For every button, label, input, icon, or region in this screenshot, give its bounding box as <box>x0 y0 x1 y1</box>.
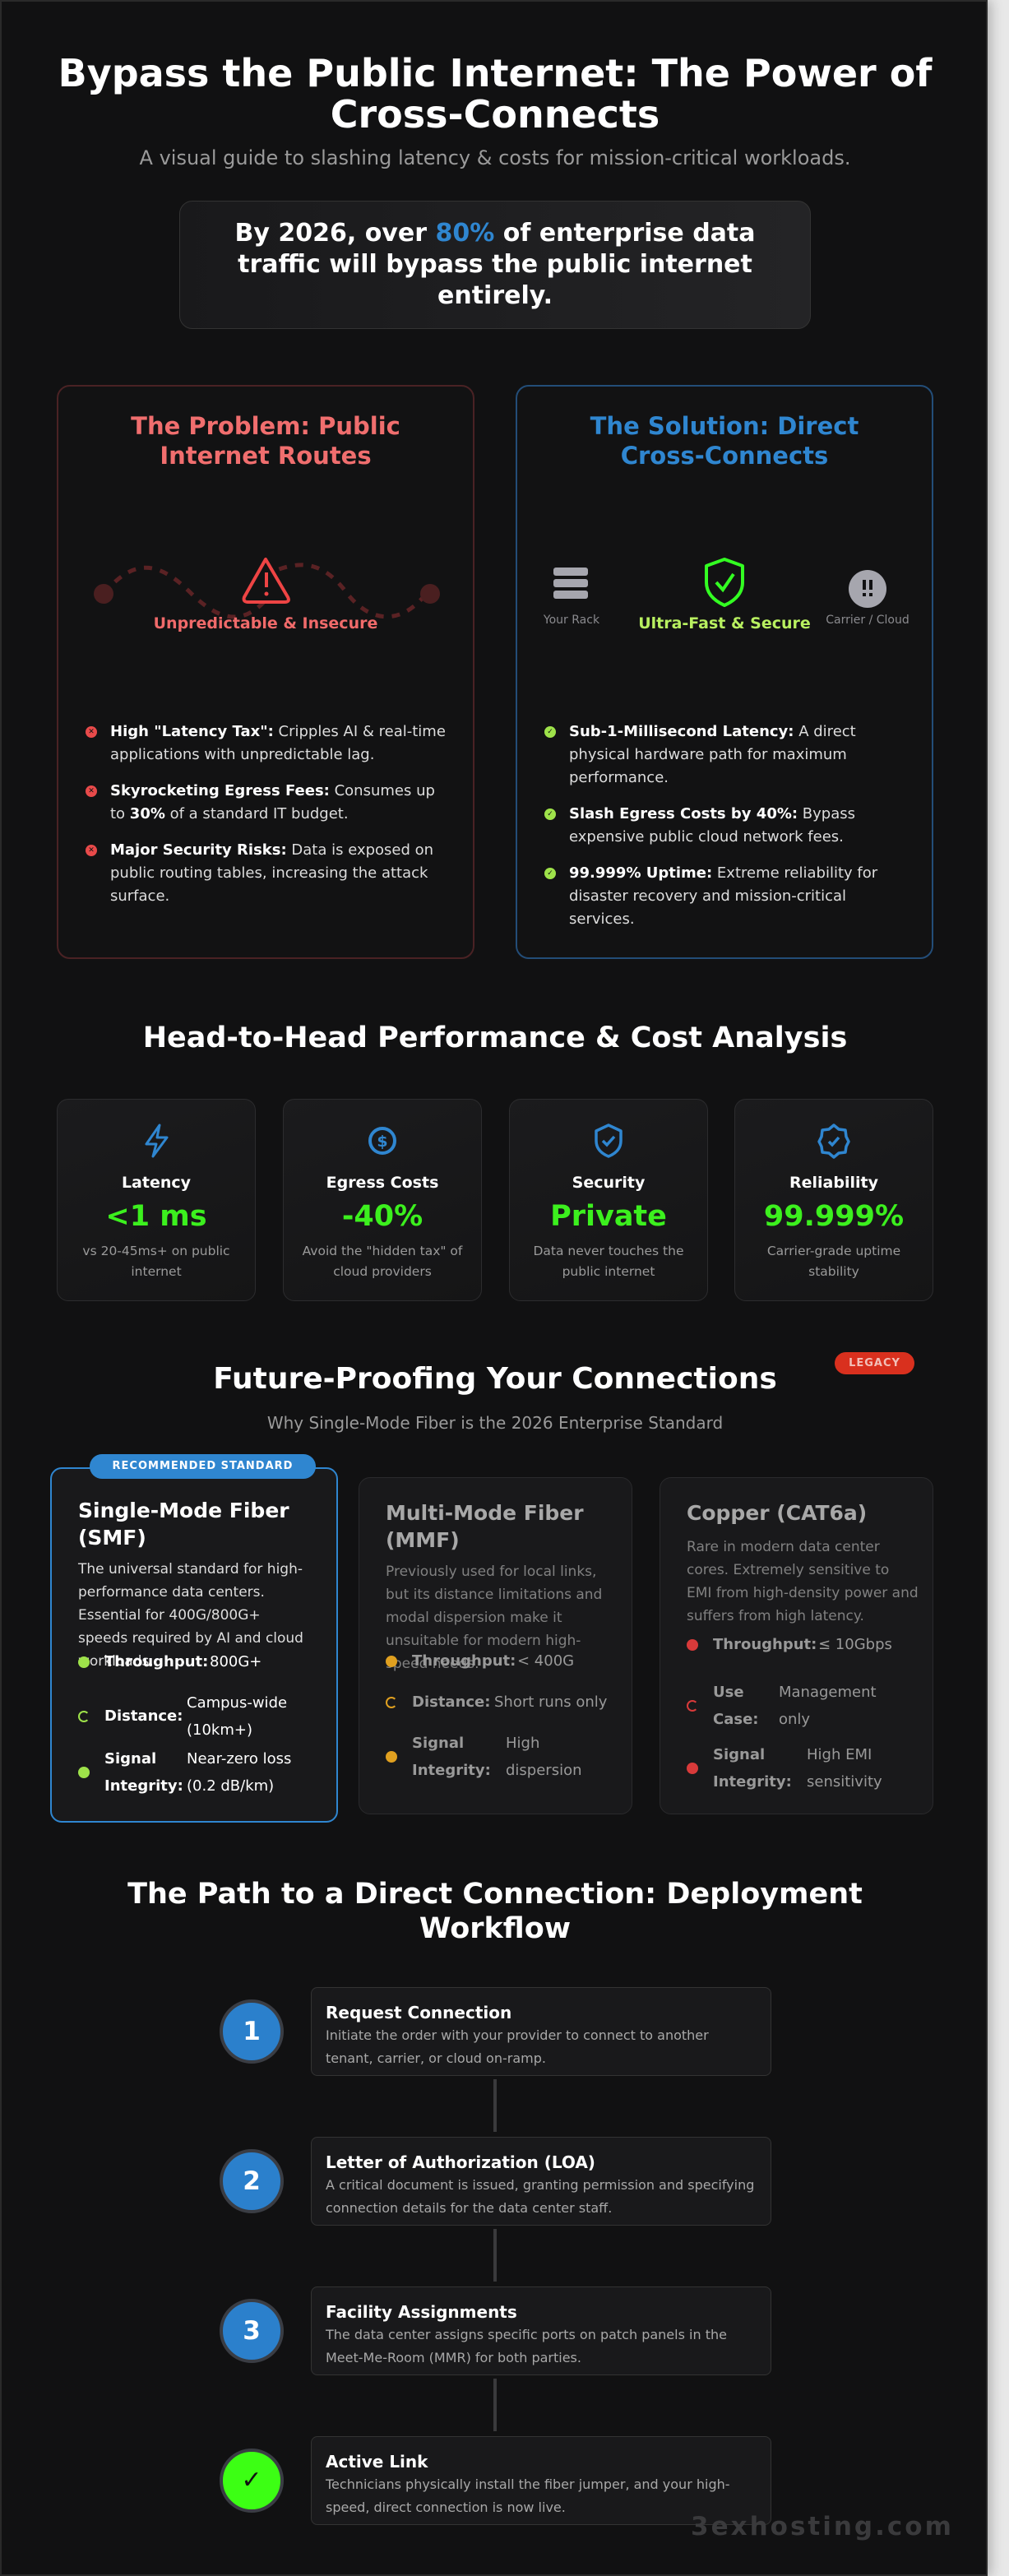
card: multi-mode fiber: High dispersion <box>506 1735 582 1779</box>
badge: recommended standard: RECOMMENDED STANDARD <box>113 1460 293 1472</box>
problem heading: The Problem: Public <box>131 412 400 440</box>
card: multi-mode fiber: Throughput: <box>412 1652 516 1670</box>
diagram: unpredictable route: Unpredictable & Insecure <box>154 614 377 632</box>
problem heading: Internet Routes <box>160 442 372 470</box>
diagram: direct link <box>543 558 909 632</box>
callout: 80% stat <box>179 201 811 329</box>
card: latency: vs 20-45ms+ on public internet <box>82 1244 230 1279</box>
card: latency <box>57 1099 256 1301</box>
card: latency: <1 ms <box>105 1200 207 1233</box>
subheading: Why Single-Mode Fiber is the 2026 Enterprise Standard <box>267 1413 723 1433</box>
card: reliability: 99.999% <box>764 1200 904 1233</box>
card: copper: Rare in modern data center cores. Extremely sensitive to EMI from high-density power and suffers from high latency. <box>687 1539 919 1624</box>
card: security: Private <box>550 1200 667 1233</box>
card: reliability: Reliability <box>789 1174 878 1192</box>
card: multi-mode fiber: Distance: <box>412 1693 490 1711</box>
panel: solution: ✓ <box>547 869 553 878</box>
solution heading: The Solution: Direct <box>590 412 859 440</box>
step 4: active link: Active Link <box>326 2452 428 2472</box>
panel: problem: Major Security Risks: Data is exposed on public routing tables, increasing the attack surface. <box>110 841 433 905</box>
card: single-mode fiber: Campus-wide (10km+) <box>187 1694 287 1739</box>
step 4: active link <box>220 2436 771 2525</box>
card: copper: Throughput: <box>713 1636 817 1653</box>
heading: head-to-head: Head-to-Head Performance & Cost Analysis <box>143 1022 847 1054</box>
card: egress: $ <box>377 1133 388 1151</box>
diagram: unpredictable route <box>94 558 440 632</box>
badge: legacy: LEGACY <box>849 1357 900 1369</box>
step 3: Facility Assignments <box>326 2302 517 2322</box>
panel: problem: Skyrocketing Egress Fees: Consumes up to 30% of a standard IT budget. <box>110 782 435 822</box>
heading: workflow: The Path to a Direct Connection: Deployment Workflow <box>127 1878 863 1945</box>
step 2: 2 <box>243 2166 261 2196</box>
card: single-mode fiber: 800G+ <box>210 1653 262 1670</box>
card: copper: Signal <box>713 1746 765 1763</box>
card: egress: Avoid the "hidden tax" of cloud providers <box>303 1244 462 1279</box>
step 1 <box>220 1987 771 2076</box>
card: security <box>509 1099 708 1301</box>
panel: problem: ✕ <box>88 787 95 795</box>
card: egress <box>283 1099 482 1301</box>
heading: future-proofing: Future-Proofing Your Connections <box>213 1362 777 1396</box>
card: copper: Integrity: <box>713 1773 792 1791</box>
badge: recommended standard <box>90 1454 316 1479</box>
card: multi-mode fiber: Previously used for local links, but its distance limitations and modal dispersion make it unsuitable for modern high-speed needs. <box>386 1564 602 1672</box>
card: single-mode fiber: (SMF) <box>78 1526 146 1550</box>
solution heading <box>590 412 859 470</box>
card: copper <box>660 1477 933 1814</box>
solution bullets: Sub-1-Millisecond Latency: A direct physical hardware path for maximum performance. <box>569 723 856 786</box>
card: single-mode fiber: The universal standard for high-performance data centers. Essential for 400G/800G+ speeds required by AI and cloud workloads. <box>78 1561 303 1670</box>
step 2: A critical document is issued, granting permission and specifying connection details for the data center staff. <box>326 2177 754 2216</box>
subtitle: A visual guide to slashing latency & costs for mission-critical workloads. <box>140 146 850 169</box>
card: multi-mode fiber: Signal <box>412 1735 464 1752</box>
card: reliability: Carrier-grade uptime stability <box>767 1244 900 1279</box>
card: single-mode fiber: Throughput: <box>104 1653 208 1670</box>
callout: 80% stat: entirely. <box>437 281 553 310</box>
card: egress: -40% <box>342 1200 423 1233</box>
step 1: Initiate the order with your provider to connect to another tenant, carrier, or cloud on-ramp. <box>326 2027 709 2066</box>
card: copper: ≤ 10Gbps <box>818 1636 892 1653</box>
card: single-mode fiber: Signal <box>104 1750 156 1768</box>
card: multi-mode fiber: Multi-Mode Fiber <box>386 1501 584 1525</box>
watermark: 3exhosting.com <box>691 2512 954 2541</box>
card: copper: Use <box>713 1684 744 1701</box>
card: egress: Egress Costs <box>326 1174 438 1192</box>
card: security: Data never touches the public internet <box>533 1244 684 1279</box>
card: multi-mode fiber: Integrity: <box>412 1762 491 1779</box>
card: single-mode fiber: Single-Mode Fiber <box>78 1499 289 1522</box>
panel: solution <box>516 385 933 959</box>
step 2 <box>220 2137 771 2226</box>
step 1: 1 <box>243 2017 261 2046</box>
card: copper: Copper (CAT6a) <box>687 1501 867 1525</box>
card: multi-mode fiber: (MMF) <box>386 1528 460 1552</box>
step 4: active link: ✓ <box>241 2466 262 2495</box>
card: copper: Case: <box>713 1711 758 1728</box>
card: copper: Management only <box>779 1684 877 1728</box>
step 3 <box>220 2286 771 2375</box>
diagram: direct link: Ultra-Fast & Secure <box>638 614 811 632</box>
panel: solution: 99.999% Uptime: Extreme reliability for disaster recovery and mission-critical services. <box>569 864 877 928</box>
card: security: Security <box>572 1174 645 1192</box>
card: multi-mode fiber: < 400G <box>517 1652 574 1670</box>
step 1: Request Connection <box>326 2003 511 2022</box>
diagram: direct link: Carrier / Cloud <box>826 614 909 627</box>
step 3: 3 <box>243 2316 261 2346</box>
problem bullets: High "Latency Tax": Cripples AI & real-time applications with unpredictable lag. <box>110 723 446 763</box>
step 2: Letter of Authorization (LOA) <box>326 2152 595 2172</box>
panel: solution: Slash Egress Costs by 40%: Bypass expensive public cloud network fees. <box>569 805 855 846</box>
badge: legacy <box>835 1352 914 1374</box>
problem heading <box>131 412 400 470</box>
card: single-mode fiber: Near-zero loss (0.2 dB/km) <box>187 1750 291 1795</box>
panel: solution: ✓ <box>547 728 553 736</box>
panel: solution: ✓ <box>547 810 553 818</box>
callout: 80% stat: traffic will bypass the public internet <box>238 250 752 279</box>
step 4: active link: Technicians physically install the fiber jumper, and your high-speed, direct connection is now live. <box>326 2476 730 2515</box>
callout: 80% stat: By 2026, over 80% of enterprise data <box>234 219 756 248</box>
card: single-mode fiber: Distance: <box>104 1707 183 1725</box>
panel: problem: ✕ <box>88 846 95 855</box>
card: latency: Latency <box>122 1174 191 1192</box>
title: Bypass the Public Internet: The Power of Cross-Connects <box>58 51 932 137</box>
diagram: direct link: Your Rack <box>543 614 600 627</box>
card: reliability <box>734 1099 933 1301</box>
card: multi-mode fiber: Short runs only <box>494 1693 607 1711</box>
step 3: The data center assigns specific ports on patch panels in the Meet-Me-Room (MMR) for both parties. <box>326 2327 727 2365</box>
card: single-mode fiber <box>50 1467 338 1823</box>
panel: problem <box>57 385 474 959</box>
solution heading: Cross-Connects <box>621 442 828 470</box>
card: multi-mode fiber <box>359 1477 632 1814</box>
panel: problem: ✕ <box>88 728 95 736</box>
card: copper: High EMI sensitivity <box>807 1746 882 1791</box>
card: single-mode fiber: Integrity: <box>104 1777 183 1795</box>
